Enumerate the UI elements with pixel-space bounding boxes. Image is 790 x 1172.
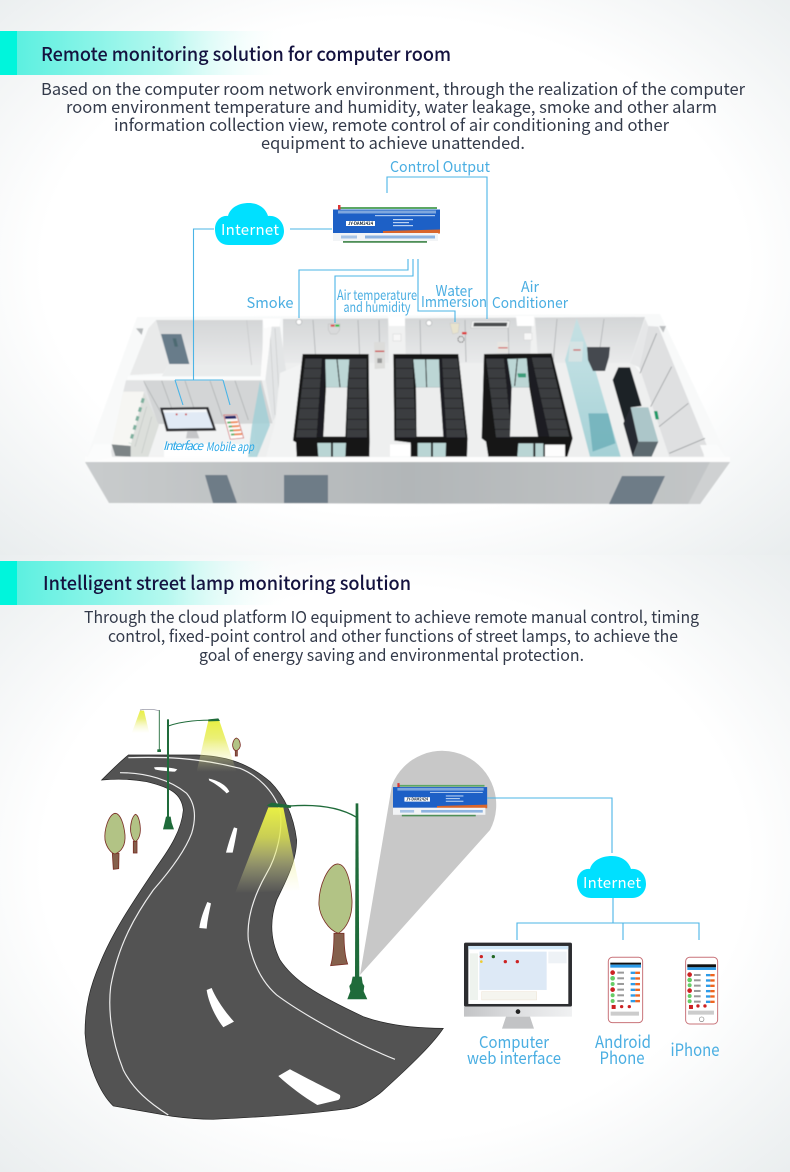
grey server cabinet bbox=[587, 347, 610, 371]
text block: computer room description: room environment temperature and humidity, water leakage, smoke and other alarm bbox=[66, 94, 717, 118]
street lamp medium bbox=[163, 718, 220, 829]
section banner: computer room bbox=[0, 31, 290, 75]
rack row 1 bbox=[293, 354, 370, 457]
connector: temperature sensor bbox=[335, 259, 413, 323]
label: water immersion bbox=[421, 280, 487, 312]
icon: internet cloud 2 bbox=[577, 856, 646, 898]
temperature sensor bbox=[328, 324, 340, 334]
label: air temperature and humidity: and humidity bbox=[344, 297, 411, 317]
computer web interface illustration bbox=[464, 943, 572, 1029]
tree medium bbox=[105, 813, 125, 869]
callout balloon bbox=[360, 751, 496, 975]
road lane edge lines bbox=[110, 757, 395, 1115]
label: computer web interface bbox=[467, 1029, 561, 1069]
right floor strip bbox=[266, 364, 301, 457]
mobile phone bbox=[224, 415, 244, 439]
street lamp small bbox=[140, 709, 161, 752]
divider wall bbox=[128, 318, 286, 422]
monitor screen bbox=[468, 946, 568, 1004]
street lamp big bbox=[267, 803, 367, 999]
label: water immersion: Immersion bbox=[421, 291, 487, 312]
glass partition right bbox=[565, 318, 621, 457]
storage cabinets bbox=[112, 392, 159, 457]
text block: computer room description: information collection view, remote control of air conditioning and other bbox=[114, 112, 670, 136]
tree large bbox=[319, 864, 352, 966]
device: IO controller in balloon: JY-DAM2424 bbox=[406, 798, 429, 803]
lower left room bbox=[110, 380, 273, 457]
label: air temperature and humidity bbox=[337, 285, 417, 317]
small wall boxes bbox=[393, 333, 532, 341]
section banner: street lamp bbox=[0, 561, 290, 605]
label: water immersion: Water bbox=[436, 280, 473, 301]
icon: iphone bbox=[686, 957, 718, 1024]
label: android phone: Phone bbox=[600, 1044, 644, 1069]
light beam small lamp bbox=[132, 711, 149, 733]
front doors bbox=[205, 475, 665, 504]
outer wall cap bbox=[85, 314, 730, 462]
label: computer web interface: Computer bbox=[479, 1029, 550, 1053]
label: smoke: Smoke bbox=[246, 292, 294, 313]
text block: street lamp description bbox=[84, 604, 700, 666]
rack row 3 bbox=[482, 353, 573, 457]
label: air temperature and humidity: Air temperature bbox=[337, 285, 417, 305]
label: air conditioner: Conditioner bbox=[492, 292, 568, 313]
label: interface and mobile app: Interface bbox=[163, 437, 204, 454]
rack row 2 bbox=[390, 354, 468, 457]
label: air conditioner bbox=[492, 276, 568, 313]
text block: computer room description bbox=[41, 76, 746, 154]
heading: street lamp solution: Intelligent street lamp monitoring solution bbox=[43, 569, 411, 596]
text block: computer room description: equipment to achieve unattended. bbox=[261, 130, 525, 154]
connector: cloud to interface and mobile app bbox=[175, 229, 230, 405]
label: android phone: Android bbox=[595, 1028, 651, 1053]
monitor body bbox=[464, 943, 572, 1007]
water sensor bbox=[450, 323, 467, 342]
label: air conditioner: Air bbox=[521, 276, 539, 297]
connector: water sensor bbox=[418, 259, 455, 322]
icon: internet cloud: Internet bbox=[221, 219, 279, 240]
back wall bbox=[283, 317, 645, 370]
text block: street lamp description: goal of energy saving and environmental protection. bbox=[199, 642, 584, 666]
connector: control output bbox=[387, 177, 487, 319]
monitor chin bbox=[464, 1007, 572, 1017]
right wall bbox=[630, 318, 728, 462]
air conditioner vent bbox=[471, 321, 510, 328]
tree small left bbox=[131, 814, 140, 853]
illustration: road and lamps bbox=[85, 709, 443, 1119]
glass door left bbox=[248, 381, 270, 457]
fire boxes bbox=[374, 342, 508, 369]
icon: android phone bbox=[608, 957, 643, 1023]
upper left room bbox=[130, 320, 263, 377]
label background bbox=[164, 444, 258, 457]
label: interface and mobile app: Mobile app bbox=[206, 438, 255, 455]
text block: street lamp description: Through the cloud platform IO equipment to achieve remote manual control, timing bbox=[84, 604, 700, 628]
label: control output: Control Output bbox=[390, 156, 490, 177]
icon: internet cloud bbox=[215, 203, 284, 245]
floor bbox=[105, 362, 705, 457]
label: iphone: iPhone bbox=[670, 1036, 720, 1061]
label: android phone bbox=[595, 1028, 651, 1069]
tree small far bbox=[233, 738, 240, 756]
light beam medium lamp bbox=[197, 721, 237, 772]
connector: device to internet bbox=[487, 798, 612, 853]
monitor stand bbox=[502, 1017, 534, 1029]
front wall bbox=[85, 444, 730, 504]
smoke detectors bbox=[296, 319, 432, 326]
divider pillars bbox=[388, 316, 405, 326]
device: IO controller: JY-DAM2424 bbox=[348, 221, 374, 227]
label: computer web interface: web interface bbox=[467, 1045, 561, 1069]
road centre dashes bbox=[154, 767, 340, 1105]
label: interface and mobile app bbox=[163, 437, 255, 455]
connector: smoke sensor bbox=[299, 259, 408, 318]
text block: computer room description: Based on the computer room network environment, through the realization of the computer bbox=[41, 76, 746, 100]
light beam big lamp bbox=[235, 807, 300, 893]
icon: internet cloud 2: Internet bbox=[583, 872, 641, 893]
computer monitor bbox=[160, 407, 216, 438]
connector: cloud to device bbox=[290, 228, 332, 230]
device: IO controller in balloon bbox=[393, 783, 487, 816]
text block: street lamp description: control, fixed-point control and other functions of street lamps, to achieve the bbox=[108, 623, 678, 647]
connector: internet to clients bbox=[517, 898, 699, 940]
right equipment racks bbox=[613, 367, 658, 457]
device: IO controller bbox=[333, 205, 440, 243]
road surface bbox=[85, 755, 443, 1119]
illustration: data centre floor plan bbox=[85, 314, 730, 504]
heading: remote monitoring solution: Remote monitoring solution for computer room bbox=[41, 40, 451, 67]
